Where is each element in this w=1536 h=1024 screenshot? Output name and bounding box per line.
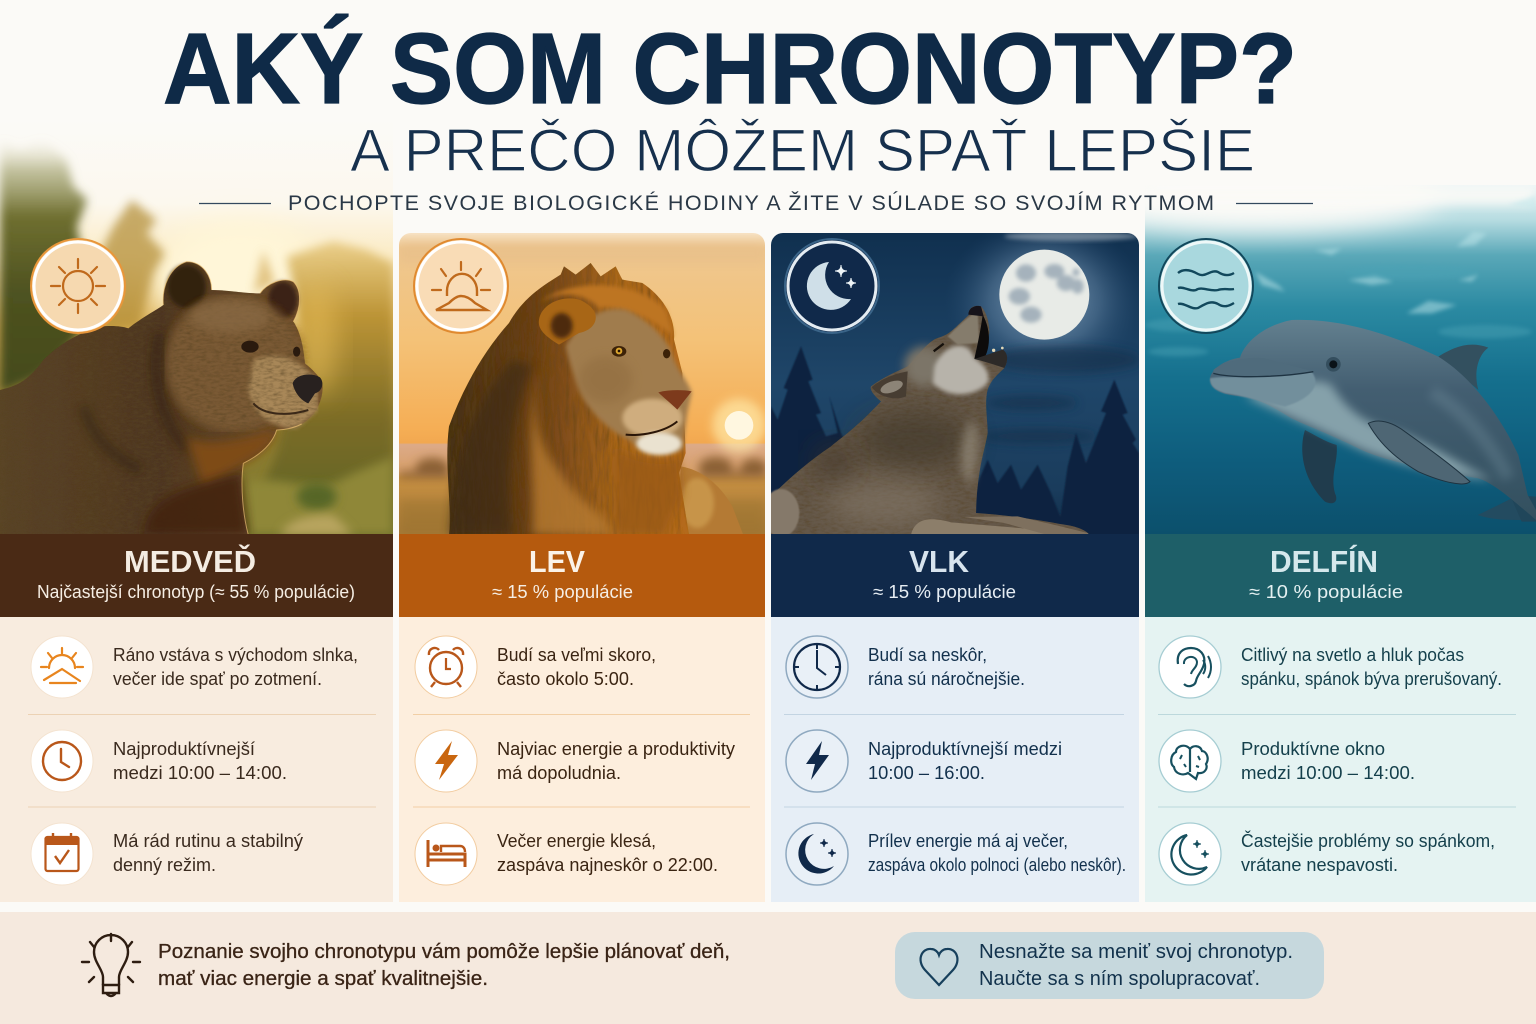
bear	[0, 262, 323, 535]
moon	[999, 250, 1089, 340]
row: bed	[415, 823, 477, 885]
panel: lion details	[399, 617, 765, 902]
panel: wolf band	[771, 534, 1139, 617]
footer message: Poznanie svojho chronotypu vám pomôže lepšie plánovať deň,	[158, 941, 730, 963]
callout: heart message: Nesnažte sa meniť svoj chronotyp.	[979, 941, 1293, 963]
panel: wolf details	[771, 617, 1139, 902]
badge: moon	[785, 239, 879, 333]
panel: dolphin details: vrátane nespavosti.	[1241, 854, 1398, 875]
panel: lion band	[399, 534, 765, 617]
panel: dolphin details: Častejšie problémy so spánkom,	[1241, 830, 1495, 851]
panel: bear details: Má rád rutinu a stabilný	[113, 830, 304, 851]
panel: wolf details: Najproduktívnejší medzi	[868, 738, 1062, 759]
panel: dolphin photo	[1068, 158, 1536, 535]
row: ear	[1159, 636, 1221, 698]
panel: dolphin details: spánku, spánok býva prerušovaný.	[1241, 668, 1502, 689]
icon: light bulb	[82, 934, 140, 996]
panel: bear details: Najproduktívnejší	[113, 738, 256, 759]
badge: sunrise	[414, 239, 508, 333]
wolf	[763, 306, 1089, 537]
footer band	[0, 912, 1536, 1024]
panel: lion details: Najviac energie a produktivity	[497, 738, 736, 759]
row: sunrise	[31, 636, 93, 698]
title: AKÝ SOM CHRONOTYP?	[163, 13, 1297, 125]
panel: wolf photo	[763, 216, 1144, 537]
panel: dolphin details: medzi 10:00 – 14:00.	[1241, 762, 1415, 783]
panel: bear band: MEDVEĎ	[124, 543, 256, 579]
panel: bear details: Ráno vstáva s východom slnka,	[113, 644, 358, 665]
panel: wolf details: rána sú náročnejšie.	[868, 668, 1025, 689]
footer message: mať viac energie a spať kvalitnejšie.	[158, 968, 488, 990]
row: moon outline	[1159, 823, 1221, 885]
panel: lion band: ≈ 15 % populácie	[492, 581, 633, 602]
panel: bear details	[0, 617, 393, 902]
row: bolt	[415, 730, 477, 792]
panel: dolphin band: DELFÍN	[1270, 544, 1378, 579]
tagline: POCHOPTE SVOJE BIOLOGICKÉ HODINY A ŽITE V SÚLADE SO SVOJÍM RYTMOM	[288, 190, 1214, 215]
row: brain	[1159, 730, 1221, 792]
panel: bear band	[0, 534, 393, 617]
panel: lion details: zaspáva najneskôr o 22:00.	[497, 854, 718, 875]
panel: dolphin band	[1145, 534, 1536, 617]
panel: lion details: má dopoludnia.	[497, 762, 621, 783]
row: alarm clock	[415, 636, 477, 698]
row: moon	[786, 823, 848, 885]
panel: bear details: večer ide spať po zotmení.	[113, 668, 322, 689]
footer message	[158, 941, 730, 990]
panel: lion photo	[399, 233, 767, 535]
callout: heart message: Naučte sa s ním spolupracovať.	[979, 968, 1260, 990]
panel: bear band: Najčastejší chronotyp (≈ 55 % populácie)	[37, 581, 355, 602]
row: calendar	[31, 823, 93, 885]
panel: wolf details: Budí sa neskôr,	[868, 644, 987, 665]
panel: dolphin band: ≈ 10 % populácie	[1249, 581, 1403, 602]
panel: bear details: medzi 10:00 – 14:00.	[113, 762, 287, 783]
subtitle: A PREČO MÔŽEM SPAŤ LEPŠIE	[350, 117, 1255, 184]
row: clock	[31, 730, 93, 792]
dolphin	[1210, 320, 1536, 522]
panel: dolphin details	[1145, 617, 1536, 902]
panel: lion details: Budí sa veľmi skoro,	[497, 644, 656, 665]
panel: wolf details: Prílev energie má aj večer,	[868, 830, 1068, 851]
panel: lion band: LEV	[529, 544, 585, 579]
row: clock	[786, 636, 848, 698]
panel: dolphin details: Citlivý na svetlo a hluk počas	[1241, 644, 1464, 665]
panel: lion details: často okolo 5:00.	[497, 668, 634, 689]
lion	[447, 263, 743, 535]
callout: heart message	[895, 932, 1324, 999]
panel: lion details: Večer energie klesá,	[497, 830, 656, 851]
panel: wolf band: ≈ 15 % populácie	[873, 581, 1016, 602]
panel: wolf details: zaspáva okolo polnoci (alebo neskôr).	[868, 854, 1126, 875]
panel: bear photo	[0, 120, 393, 535]
badge: sun	[31, 239, 125, 333]
badge: waves	[1159, 239, 1253, 333]
panel: wolf details: 10:00 – 16:00.	[868, 762, 985, 783]
row: bolt	[786, 730, 848, 792]
panel: bear details: denný režim.	[113, 854, 216, 875]
panel: wolf band: VLK	[909, 544, 970, 579]
panel: dolphin details: Produktívne okno	[1241, 738, 1385, 759]
